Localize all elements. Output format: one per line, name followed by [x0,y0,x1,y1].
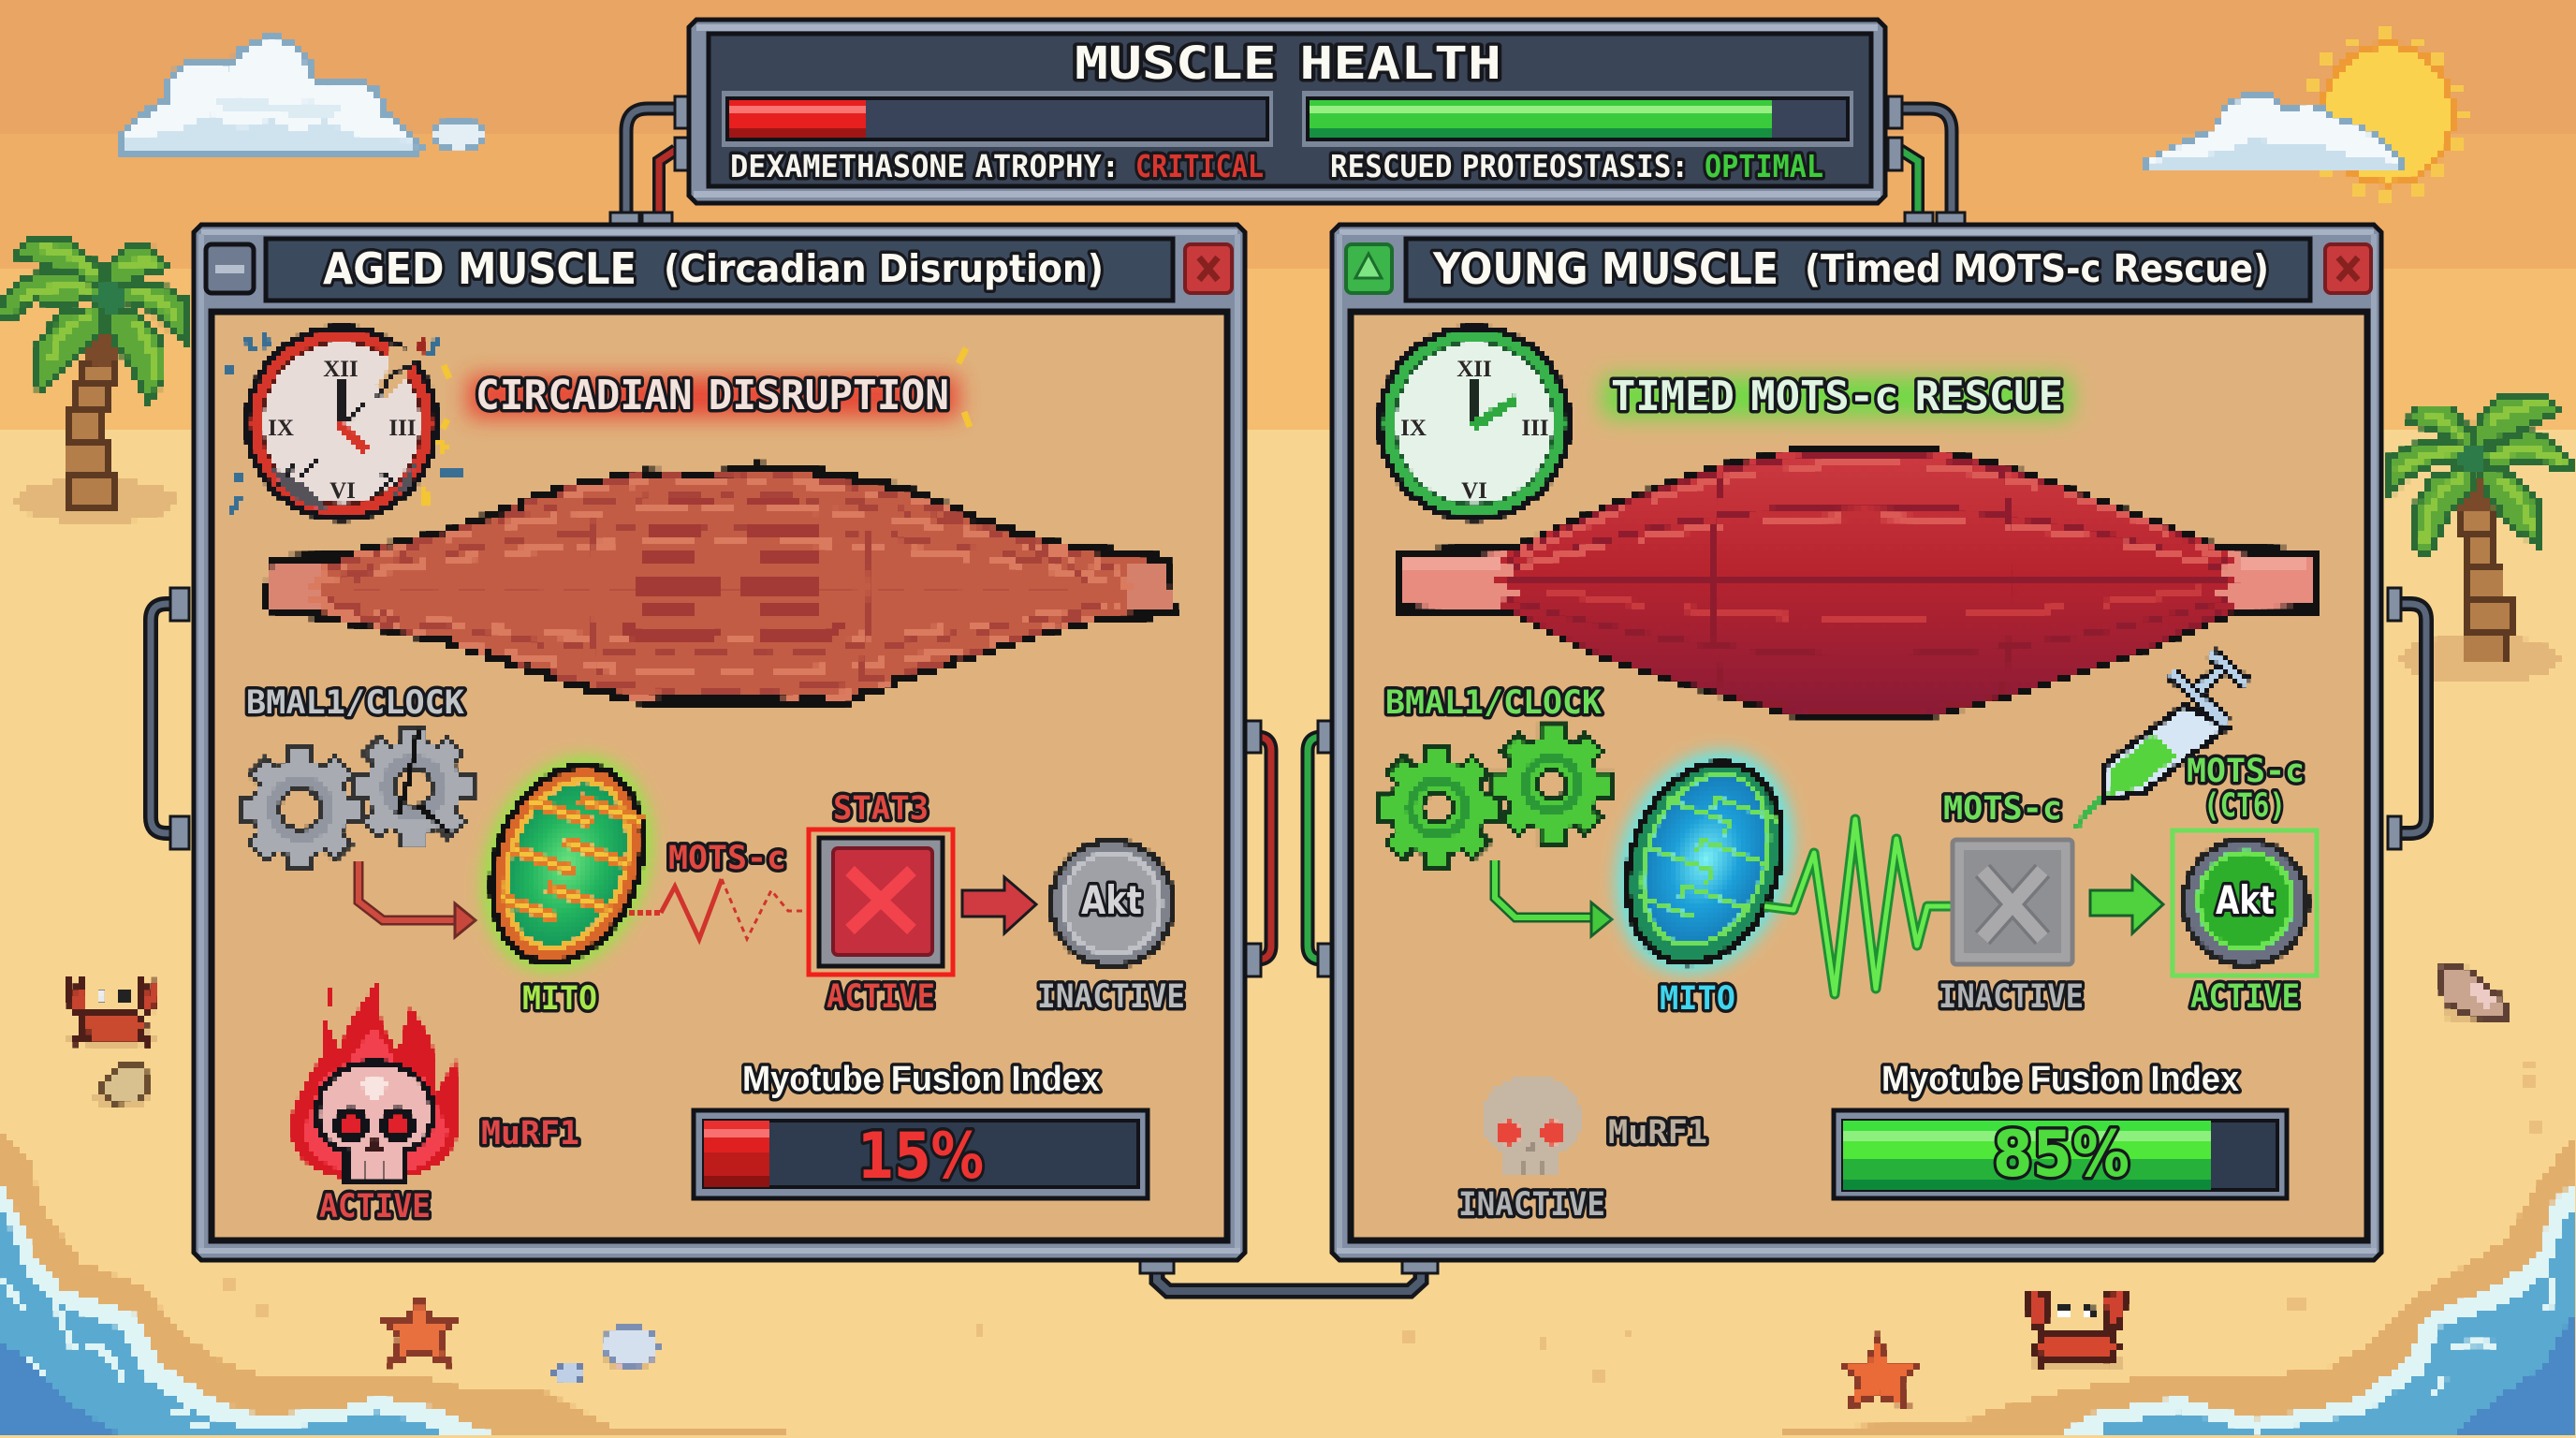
icon: broken gears [240,727,474,870]
label: mots-c ct6: (CT6) [2203,787,2286,825]
icon: healthy clock: III [1521,416,1549,441]
title bar: YOUNG MUSCLE [1432,243,1778,294]
icon: active akt [2173,830,2317,976]
signal: strong mots-c wave [1764,819,1952,994]
icon: healthy clock: IX [1400,416,1427,441]
title bar: AGED MUSCLE [323,243,637,294]
crab left [67,979,157,1047]
pebble small [554,1363,582,1384]
fusion index: young: 85% [1993,1118,2130,1192]
icon: broken clock: IX [268,416,294,441]
status label: dexamethasone atrophy: CRITICAL [1135,148,1264,184]
label: active murf1: ACTIVE [319,1188,431,1225]
heading: circadian disruption [443,348,970,429]
status label: rescued proteostasis: RESCUED PROTEOSTASIS: [1330,148,1689,184]
icon: broken clock: III [388,416,417,441]
arrow: clock to mitochondrion [359,861,476,937]
panel: muscle health status [689,20,1885,203]
icon: healthy clock: XII [1456,357,1492,382]
status label: rescued proteostasis: OPTIMAL [1705,148,1823,184]
muscle: healthy [1398,429,2316,713]
button: home [1346,244,1392,293]
title bar [1406,239,2310,301]
label: inactive stat3: INACTIVE [1939,978,2084,1016]
label: mots-c ct6: MOTS-c [2187,753,2305,790]
arrow: clock to mitochondrion [1495,860,1612,936]
icon: faded skull [1483,1076,1581,1176]
cloud right [2145,94,2402,169]
shoreline right: wet sand, foam and water [1777,1133,2576,1438]
icon: syringe [2075,653,2247,828]
fusion index: aged: Myotube Fusion Index [742,1060,1100,1099]
fusion index: aged: 15% [857,1120,984,1194]
small cloud [433,120,484,150]
label: mots-c: MOTS-c [668,840,786,877]
button: minimise [206,244,254,293]
health bar: proteostasis [1302,91,1853,147]
window frame [194,225,1245,1260]
panel: young muscle [1332,225,2381,1260]
panel: aged muscle [194,225,1245,1260]
icon: inactive akt [1051,841,1173,966]
icon: active akt: Akt [2216,877,2275,923]
icon: stressed mitochondrion [454,733,681,995]
muscle: atrophied [266,466,1173,726]
label: mots-c ct6 [2187,753,2305,825]
cables: top connectors [610,96,1965,225]
label: mito: MITO [1660,980,1735,1018]
icon: broken clock: VI [329,478,356,504]
title bar [266,239,1173,301]
title bar: (Circadian Disruption) [664,246,1104,291]
health bar: atrophy [722,91,1273,147]
icon: broken clock [225,328,462,519]
cables: side and centre connectors [151,588,2426,1291]
starfish left [382,1295,456,1363]
label: active akt: ACTIVE [2190,978,2300,1016]
window frame [1332,225,2381,1260]
palm tree left [0,237,187,523]
icon: healthy clock: VI [1461,478,1487,504]
fusion index: young [1834,1060,2287,1198]
starfish right [1842,1339,1916,1407]
label: murf1 faded: MuRF1 [1608,1114,1707,1152]
palm tree right [2388,394,2575,683]
label: murf1: MuRF1 [481,1115,579,1152]
rock [94,1064,150,1108]
icon: green gears [1377,726,1611,869]
label: bmal1/clock: BMAL1/CLOCK [246,684,464,722]
status label: dexamethasone atrophy: DEXAMETHASONE ATROPHY: [730,148,1120,184]
icon: inactive akt: Akt [1081,877,1142,923]
button: close [2325,244,2371,293]
icon: inactive stat3 block [1953,840,2072,964]
fusion index: young: Myotube Fusion Index [1881,1060,2239,1099]
arrow: stat3 to akt [962,877,1036,933]
heading: circadian disruption: CIRCADIAN DISRUPTION [476,372,949,419]
label: active stat3: ACTIVE [827,978,935,1016]
icon: healthy clock [1380,328,1569,519]
icon: active stat3 block [809,829,953,975]
heading: timed mots-c rescue: TIMED MOTS-c RESCUE [1611,373,2063,420]
label: stat3: STAT3 [833,790,929,828]
shoreline left: wet sand, foam and water [0,1133,796,1438]
cloud left [119,38,420,154]
button: close [1185,244,1232,293]
heading: muscle health: MUSCLE HEALTH [1075,37,1501,90]
icon: flaming skull [291,981,459,1181]
sand specks [221,1061,2542,1383]
shell right [2437,964,2510,1022]
crab right [2025,1291,2128,1371]
pebble large [602,1327,658,1371]
label: mito: MITO [522,980,597,1018]
title bar: (Timed MOTS-c Rescue) [1805,246,2269,291]
sun [2307,28,2469,202]
label: bmal1/clock: BMAL1/CLOCK [1385,684,1602,722]
label: inactive murf1: INACTIVE [1458,1186,1605,1224]
label: mots-c: MOTS-c [1943,790,2062,828]
arrow: block to akt [2090,876,2163,933]
label: inactive akt: INACTIVE [1037,978,1185,1016]
fusion index: aged [694,1060,1148,1198]
signal: weak mots-c wave [629,879,802,939]
icon: healthy mitochondrion [1587,726,1822,998]
icon: broken clock: XII [323,357,359,382]
